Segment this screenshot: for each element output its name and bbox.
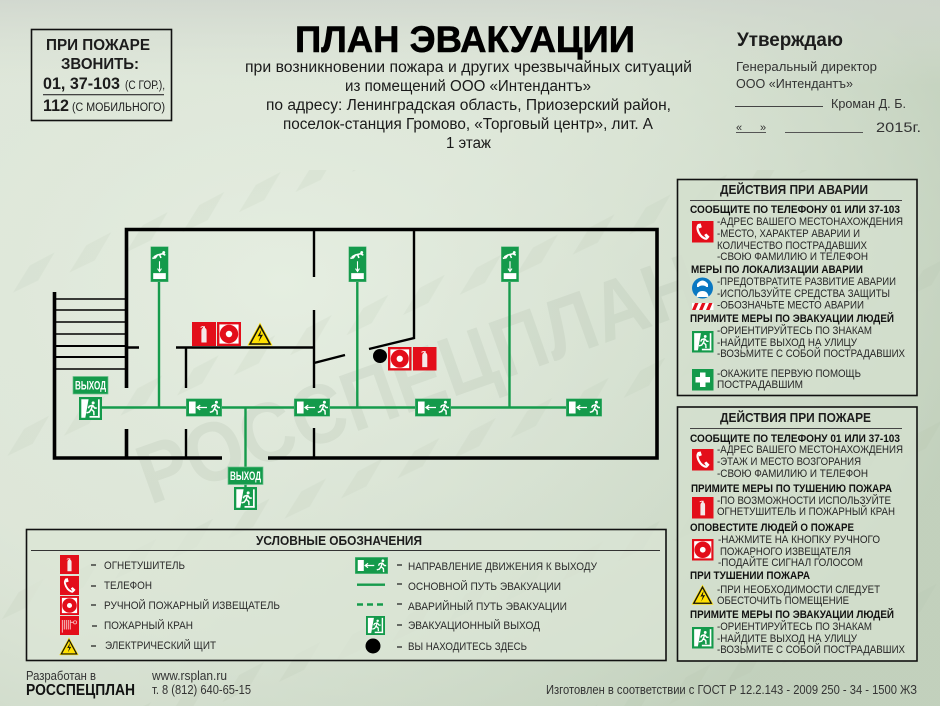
subtitle: при возникновении пожара и других чрезвычайных ситуаций xyxy=(245,59,692,76)
icon: protective gear xyxy=(692,278,713,298)
extinguisher icon 2 xyxy=(413,347,436,370)
icon: exit xyxy=(692,627,714,648)
title: ПЛАН ЭВАКУАЦИИ xyxy=(295,19,635,60)
icon: phone xyxy=(692,449,714,470)
text block: -СВОЮ ФАМИЛИЮ И ТЕЛЕФОН xyxy=(717,251,868,263)
icon: electrical warning xyxy=(691,584,714,605)
text block: ОБЕСТОЧИТЬ ПОМЕЩЕНИЕ xyxy=(717,595,849,607)
text block: -ОРИЕНТИРУЙТЕСЬ ПО ЗНАКАМ xyxy=(717,620,872,633)
sign: running down right xyxy=(501,246,519,282)
sign: running down middle xyxy=(349,246,366,282)
icon: alarm xyxy=(692,539,714,560)
text block: -ВОЗЬМИТЕ С СОБОЙ ПОСТРАДАВШИХ xyxy=(717,347,905,360)
text block: ПРИМИТЕ МЕРЫ ПО ЭВАКУАЦИИ ЛЮДЕЙ xyxy=(690,312,894,325)
floor plan xyxy=(54,229,657,510)
text block: ПРИМИТЕ МЕРЫ ПО ЭВАКУАЦИИ ЛЮДЕЙ xyxy=(690,608,894,621)
text block xyxy=(690,433,905,656)
legend labels left: ПОЖАРНЫЙ КРАН xyxy=(104,619,193,632)
legend labels left xyxy=(104,560,280,652)
panel: legend xyxy=(26,530,666,660)
legend labels right: НАПРАВЛЕНИЕ ДВИЖЕНИЯ К ВЫХОДУ xyxy=(408,561,598,573)
text block: СООБЩИТЕ ПО ТЕЛЕФОНУ 01 ИЛИ 37-103 xyxy=(690,433,900,445)
footer: developer: РОССПЕЦПЛАН xyxy=(26,682,135,699)
you are here xyxy=(373,349,387,363)
text block: -ИСПОЛЬЗУЙТЕ СРЕДСТВА ЗАЩИТЫ xyxy=(717,287,890,300)
legend labels left: ОГНЕТУШИТЕЛЬ xyxy=(104,560,185,572)
text block: -ПО ВОЗМОЖНОСТИ ИСПОЛЬЗУЙТЕ xyxy=(717,494,891,507)
legend labels left: ЭЛЕКТРИЧЕСКИЙ ЩИТ xyxy=(105,639,216,652)
exit label left xyxy=(73,376,108,394)
subtitle: поселок-станция Громово, «Торговый центр», лит. А xyxy=(283,116,654,133)
panel: fire actions xyxy=(678,407,917,661)
direction sign 2 xyxy=(294,398,330,416)
text block: -ЭТАЖ И МЕСТО ВОЗГОРАНИЯ xyxy=(717,456,861,468)
legend labels right xyxy=(408,561,598,653)
approval block: ООО «Интендантъ» xyxy=(736,76,853,91)
exit icon left xyxy=(79,397,102,420)
sign: running down left xyxy=(151,246,168,282)
panel: fire phone numbers: 112 xyxy=(43,96,69,115)
legend heading: УСЛОВНЫЕ ОБОЗНАЧЕНИЯ xyxy=(256,533,422,548)
legend: emergency route xyxy=(357,603,385,606)
text block: -ПРИ НЕОБХОДИМОСТИ СЛЕДУЕТ xyxy=(717,584,880,596)
exit label bottom: ВЫХОД xyxy=(230,471,261,483)
icon: exit xyxy=(692,331,714,352)
icon: extinguisher xyxy=(692,497,714,518)
panel: fire phone numbers: (С ГОР.), xyxy=(125,80,165,92)
legend: direction sign xyxy=(355,557,388,574)
direction sign 1 xyxy=(186,398,222,416)
electrical panel icon xyxy=(247,322,273,346)
text block: СООБЩИТЕ ПО ТЕЛЕФОНУ 01 ИЛИ 37-103 xyxy=(690,204,900,216)
text block: МЕРЫ ПО ЛОКАЛИЗАЦИИ АВАРИИ xyxy=(691,264,863,276)
text block: -ОРИЕНТИРУЙТЕСЬ ПО ЗНАКАМ xyxy=(717,324,872,337)
legend labels left: ТЕЛЕФОН xyxy=(104,580,152,592)
extinguisher icon xyxy=(192,322,216,346)
text block: -НАЖМИТЕ НА КНОПКУ РУЧНОГО xyxy=(718,534,880,546)
legend labels right: ЭВАКУАЦИОННЫЙ ВЫХОД xyxy=(408,619,540,632)
legend: phone xyxy=(60,576,79,595)
text block: -ПРЕДОТВРАТИТЕ РАЗВИТИЕ АВАРИИ xyxy=(717,276,896,288)
alarm icon 2 xyxy=(388,347,412,370)
exit label left: ВЫХОД xyxy=(75,380,106,392)
text block: -АДРЕС ВАШЕГО МЕСТОНАХОЖДЕНИЯ xyxy=(717,444,903,456)
exit label bottom xyxy=(228,467,263,484)
panel: fire phone numbers: ЗВОНИТЬ: xyxy=(61,56,139,73)
footer: developer xyxy=(26,669,135,699)
text block: -СВОЮ ФАМИЛИЮ И ТЕЛЕФОН xyxy=(717,468,868,480)
direction sign 4 xyxy=(566,398,602,416)
footer: contacts xyxy=(151,669,251,697)
legend: alarm xyxy=(60,596,79,615)
panel: accident actions xyxy=(678,180,917,396)
panel: fire phone numbers: (С МОБИЛЬНОГО) xyxy=(72,102,165,114)
legend: extinguisher xyxy=(60,555,79,574)
direction sign 3 xyxy=(415,398,451,416)
text block: ОГНЕТУШИТЕЛЬ И ПОЖАРНЫЙ КРАН xyxy=(717,505,895,518)
text block: -МЕСТО, ХАРАКТЕР АВАРИИ И xyxy=(717,228,860,240)
text block: ПРИ ТУШЕНИИ ПОЖАРА xyxy=(690,570,810,582)
approval block: « xyxy=(736,122,742,134)
watermark: РОССПЕЦПЛАН xyxy=(125,235,712,522)
text block: ПРИМИТЕ МЕРЫ ПО ТУШЕНИЮ ПОЖАРА xyxy=(691,483,892,495)
approval block: Кроман Д. Б. xyxy=(831,96,906,111)
subtitle: по адресу: Ленинградская область, Приозерский район, xyxy=(266,97,671,114)
panel: fire phone numbers xyxy=(32,30,172,120)
text block: ПОСТРАДАВШИМ xyxy=(717,379,803,391)
text block: -АДРЕС ВАШЕГО МЕСТОНАХОЖДЕНИЯ xyxy=(717,216,903,228)
approval block: » xyxy=(760,122,766,134)
alarm icon xyxy=(217,322,241,346)
heading: ДЕЙСТВИЯ ПРИ ПОЖАРЕ xyxy=(720,410,871,425)
approval block: Генеральный директор xyxy=(736,59,877,74)
subtitle: 1 этаж xyxy=(446,135,492,152)
text block: КОЛИЧЕСТВО ПОСТРАДАВШИХ xyxy=(717,240,867,252)
subtitle: из помещений ООО «Интендантъ» xyxy=(345,78,591,95)
legend: you are here xyxy=(366,638,380,654)
legend labels right: ОСНОВНОЙ ПУТЬ ЭВАКУАЦИИ xyxy=(408,580,561,593)
text block: -ОКАЖИТЕ ПЕРВУЮ ПОМОЩЬ xyxy=(717,368,861,380)
approval block: 2015г. xyxy=(876,120,921,135)
legend labels right: АВАРИЙНЫЙ ПУТЬ ЭВАКУАЦИИ xyxy=(408,600,567,613)
legend: main route xyxy=(357,584,385,586)
subtitle xyxy=(245,59,692,152)
icon: hazard tape xyxy=(692,303,714,310)
text block xyxy=(690,204,905,391)
legend: exit xyxy=(366,616,385,635)
legend labels right: ВЫ НАХОДИТЕСЬ ЗДЕСЬ xyxy=(408,641,527,653)
icon: phone xyxy=(692,221,714,242)
text block: ПОЖАРНОГО ИЗВЕЩАТЕЛЯ xyxy=(720,546,851,558)
walls xyxy=(54,229,657,458)
approval block: Утверждаю xyxy=(737,30,843,51)
legend: hydrant xyxy=(60,616,79,635)
heading: ДЕЙСТВИЯ ПРИ АВАРИИ xyxy=(720,182,868,197)
exit icon bottom xyxy=(234,487,257,510)
footer: contacts: www.rsplan.ru xyxy=(151,669,227,683)
footer: developer: Разработан в xyxy=(26,669,96,683)
text block: -НАЙДИТЕ ВЫХОД НА УЛИЦУ xyxy=(717,336,858,349)
text block: -НАЙДИТЕ ВЫХОД НА УЛИЦУ xyxy=(717,632,858,645)
panel: fire phone numbers: 01, 37-103 xyxy=(43,74,120,93)
icon: first aid xyxy=(692,369,714,390)
footer: contacts: т. 8 (812) 640-65-15 xyxy=(152,683,251,697)
text block: -ВОЗЬМИТЕ С СОБОЙ ПОСТРАДАВШИХ xyxy=(717,643,905,656)
panel: fire phone numbers: ПРИ ПОЖАРЕ xyxy=(46,37,150,54)
text block: -ОБОЗНАЧЬТЕ МЕСТО АВАРИИ xyxy=(717,300,864,312)
legend dashes xyxy=(91,565,402,647)
text block: ОПОВЕСТИТЕ ЛЮДЕЙ О ПОЖАРЕ xyxy=(690,521,854,534)
legend: electrical xyxy=(59,637,79,655)
legend labels left: РУЧНОЙ ПОЖАРНЫЙ ИЗВЕЩАТЕЛЬ xyxy=(104,599,280,612)
approval block xyxy=(735,30,921,135)
evacuation routes xyxy=(100,282,585,490)
text block: -ПОДАЙТЕ СИГНАЛ ГОЛОСОМ xyxy=(718,556,863,569)
